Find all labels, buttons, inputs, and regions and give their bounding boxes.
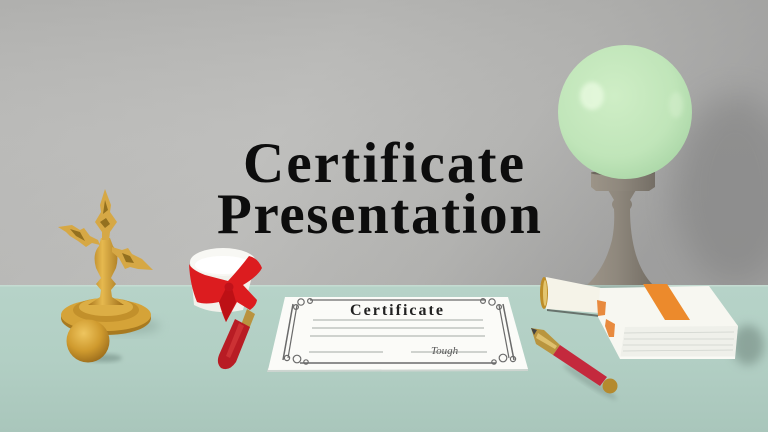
ribbon (189, 256, 262, 322)
signature: Tough (431, 345, 459, 357)
certificate heading: Certificate (350, 302, 443, 319)
certificate border (283, 299, 516, 364)
certificate lines (309, 320, 487, 352)
top spike (95, 189, 117, 240)
title: Presentation (217, 183, 541, 246)
globe (558, 45, 692, 179)
icon: green globe on stand (558, 45, 692, 290)
wall background (0, 0, 768, 287)
orange tabs (597, 300, 606, 316)
sphere (86, 354, 122, 362)
desk surface (0, 285, 768, 432)
corner ornaments (298, 299, 304, 305)
stand (587, 170, 655, 285)
icon: white cup with red ribbon (189, 248, 262, 322)
icon: white book with orange ribbon (597, 284, 764, 365)
right arm (112, 247, 153, 270)
title: Certificate (243, 132, 524, 195)
title (217, 132, 541, 246)
icon: golden ornament with sphere (58, 189, 160, 362)
icon: rolled scroll (540, 277, 606, 317)
icon: gold and red pen (531, 328, 619, 403)
icon: red pen beside cup (218, 309, 255, 369)
left arm (58, 225, 100, 247)
panel: certificate paper (267, 297, 528, 372)
orange ribbon (643, 284, 690, 320)
stem (88, 238, 124, 305)
